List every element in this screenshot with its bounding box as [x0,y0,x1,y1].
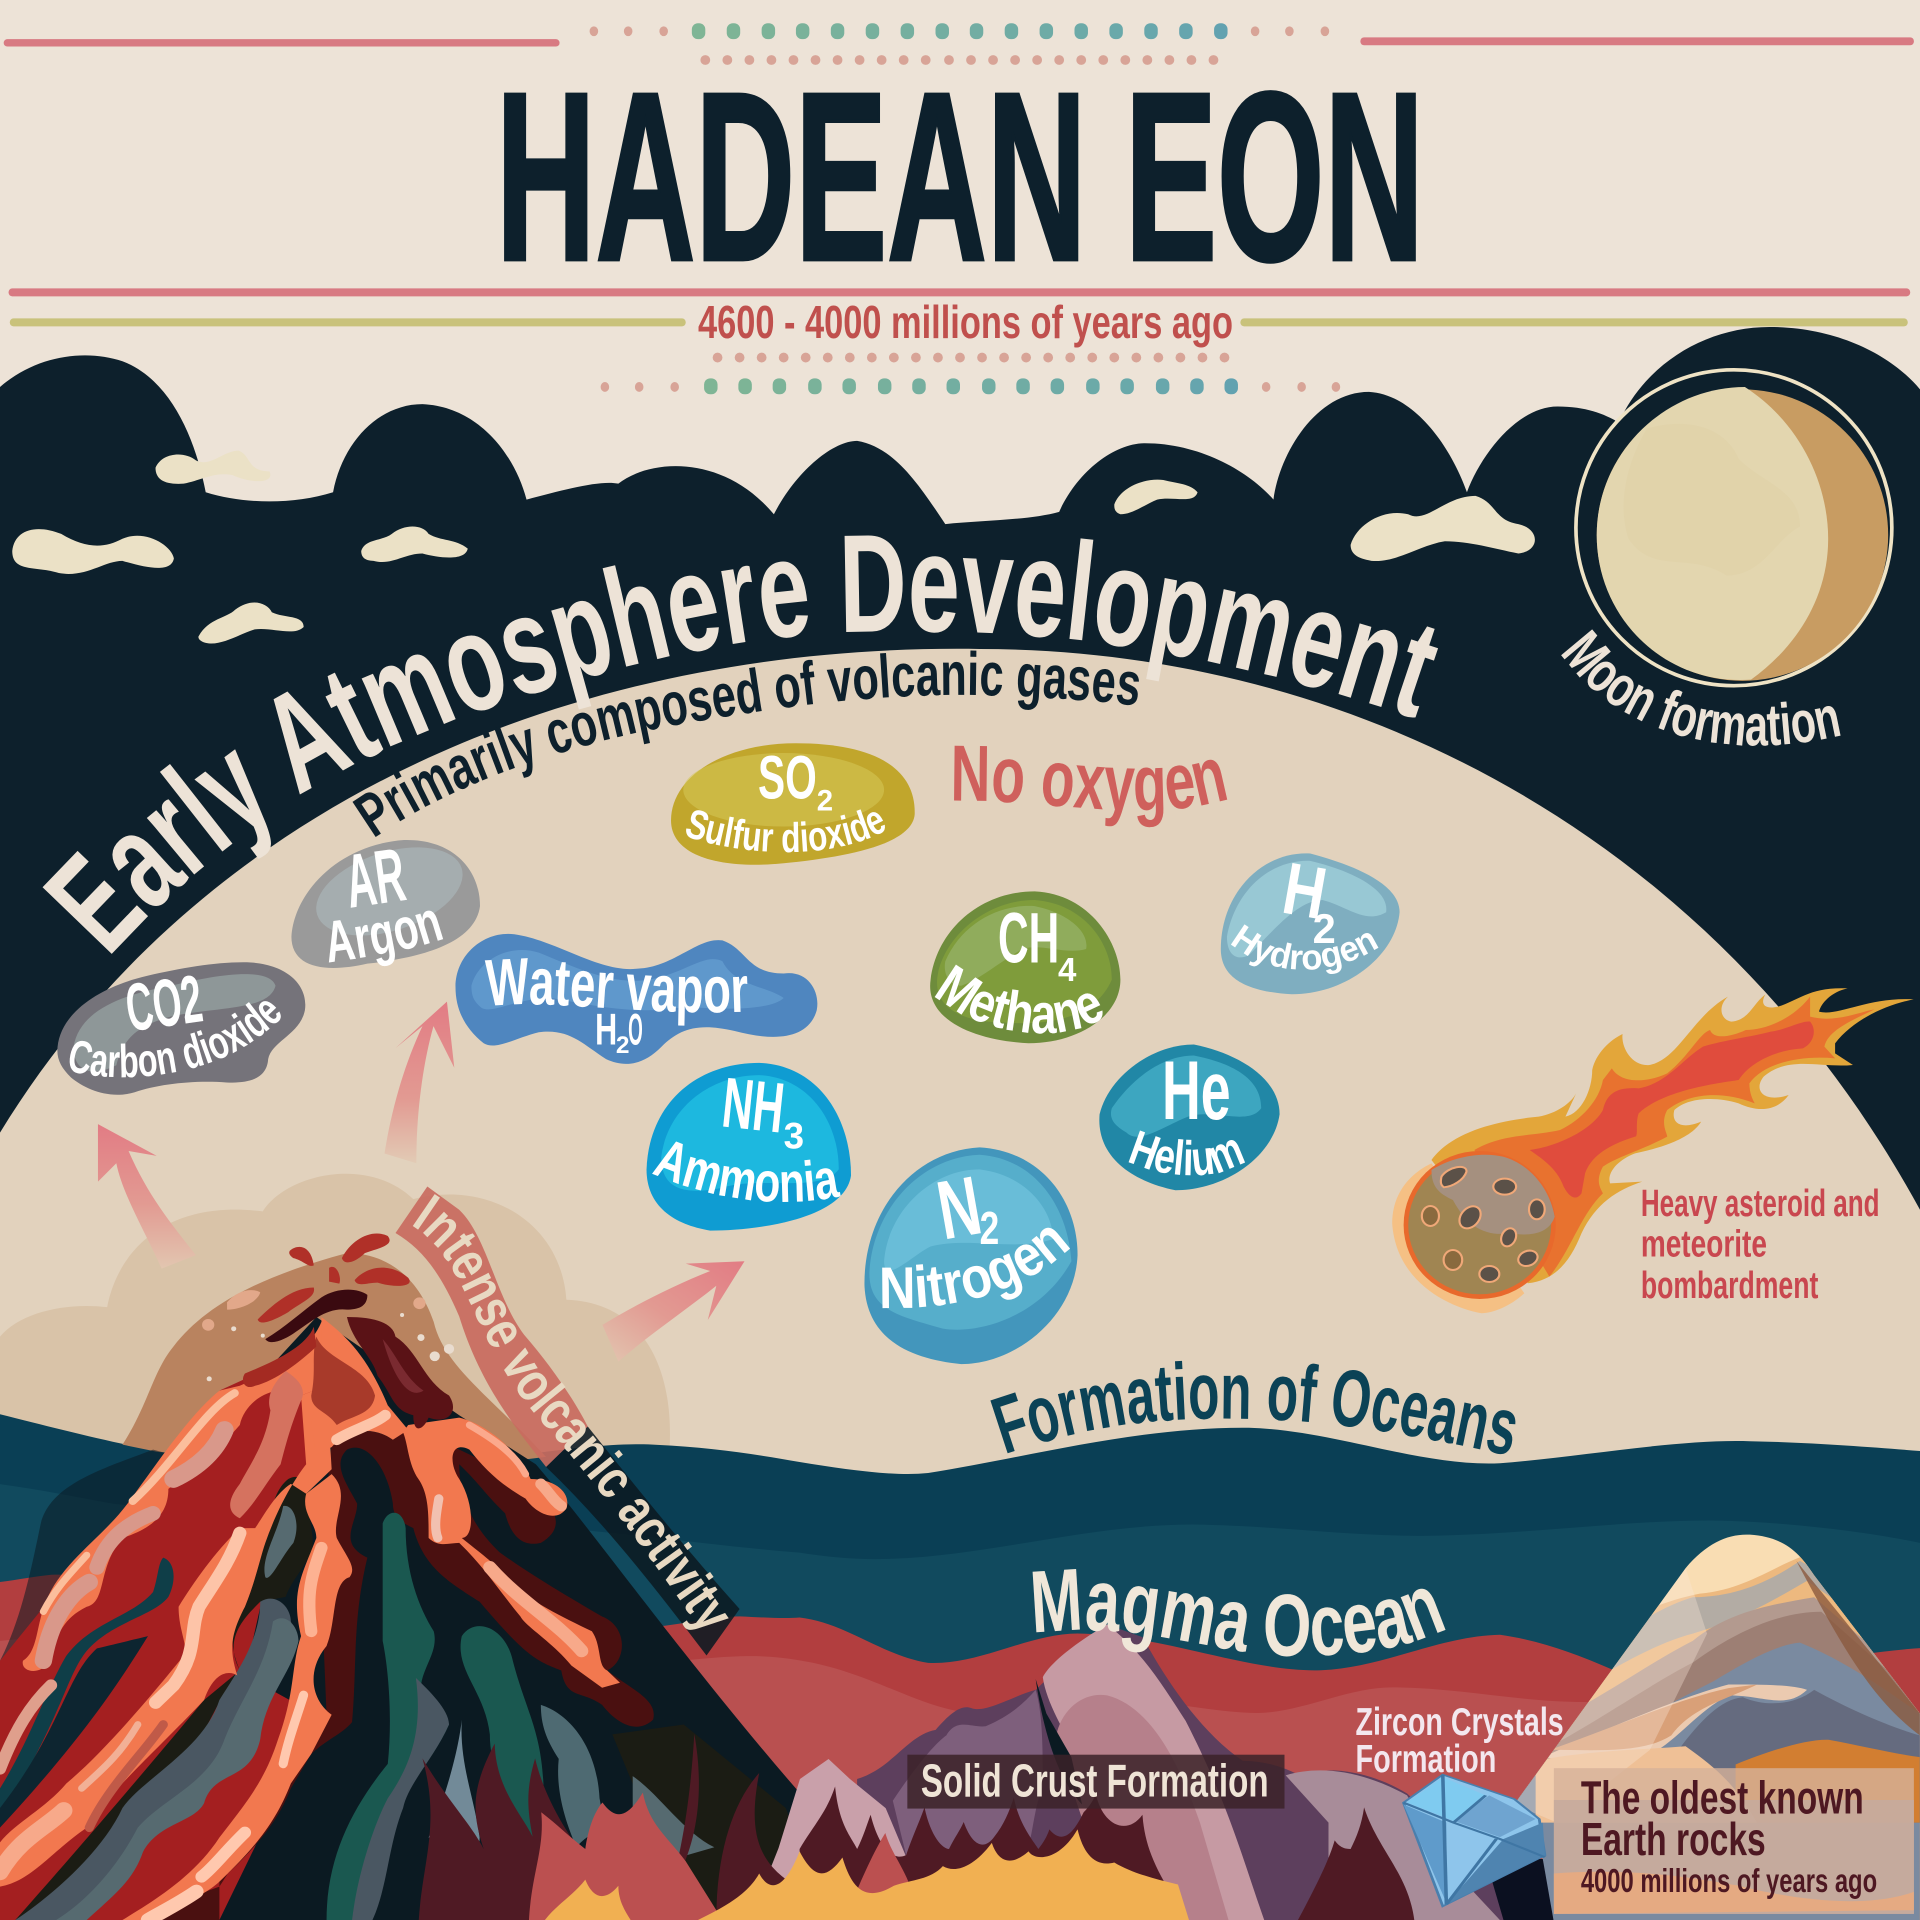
gas bubble: helium: Helium [1128,1130,1245,1176]
volcano [0,1234,800,1920]
gas bubble: nitrogen: 2 [980,1202,999,1254]
shadow gap beside the rock [1486,1859,1553,1920]
icon: meteor flame trail [1431,988,1914,1283]
banner: intense volcanic activity: Intense volcanic activity [412,1194,729,1630]
right foothill [1286,1770,1500,1920]
subtitle: time range: 4600 - 4000 millions of years ago [698,296,1233,348]
label: asteroid bombardment [1641,1183,1880,1307]
heading: early atmosphere development: Early Atmosphere Development [42,536,1438,954]
icon: moon [1576,370,1892,686]
gas bubble: hydrogen: 2 [1313,905,1336,952]
bottom flames [419,1734,1414,1920]
gas bubble: nitrogen [864,1147,1078,1364]
atmosphere dome [0,649,1920,1920]
mountains: solid crust [750,1624,1543,1920]
header decoration: rules and dots [4,23,1914,394]
gas bubble: water vapor [455,934,818,1064]
gas bubble: carbon dioxide: Carbon dioxide [70,1001,281,1078]
crater flows [243,1290,453,1428]
salmon slope [230,1371,303,1518]
gas bubble: sulfur dioxide: SO [758,743,817,811]
peak crack [1036,1679,1082,1804]
gas bubble: ammonia: 3 [784,1116,804,1157]
callout: no oxygen: No oxygen [954,746,1228,828]
label: magma ocean: Magma Ocean [1032,1569,1446,1656]
gas bubble: helium: He [1162,1044,1231,1137]
icon: zircon crystal [1403,1775,1545,1906]
gas bubble: methane: 4 [1058,952,1077,989]
label: formation of oceans: Formation of Oceans [990,1360,1516,1454]
gas bubble: hydrogen: Hydrogen [1231,924,1378,974]
icon: clouds [12,451,1535,644]
gas bubble: argon [291,832,480,968]
lava bombs and ash specks [202,1234,454,1381]
gas bubble: ammonia: Ammonia [652,1142,841,1202]
arrow: up to water vapor [384,1002,454,1163]
gas bubble: sulfur dioxide: 2 [817,785,833,818]
panel: oldest known Earth rocks [1554,1768,1914,1914]
left foothill [750,1759,929,1920]
gas bubble: water vapor: H [595,1005,617,1054]
gas bubble: argon: AR [340,832,410,925]
gas bubble: argon: Argon [328,910,444,966]
icon: meteor rock [1392,1151,1556,1313]
red lava field [0,1346,327,1920]
gas bubble: water vapor: Water vapor [484,958,748,1026]
gas bubble: carbon dioxide: CO2 [121,961,207,1046]
dark streams on the flanks [0,1477,313,1920]
label: solid crust formation: Solid Crust Formation [921,1754,1269,1806]
gas bubble: sulfur dioxide [671,743,915,865]
label: zircon crystals: Formation [1356,1738,1496,1781]
subheading: volcanic gases: Primarily composed of volcanic gases [352,650,1139,837]
dark sky with scalloped clouds [0,327,1920,1249]
gas bubble: water vapor: O [628,1005,643,1054]
ash cone [122,1253,546,1464]
lava highlights [0,1393,582,1920]
purple mountain range [857,1624,1543,1920]
teal and grey streams [327,1513,714,1920]
gas bubble: nitrogen: Nitrogen [882,1228,1070,1308]
orange lava flows [0,1317,620,1920]
gas bubble: hydrogen: H [1277,846,1333,935]
gas bubble: hydrogen [1220,846,1400,994]
layered rock mountain [1486,1532,1920,1920]
label: zircon crystals [1356,1701,1564,1781]
main peak [1043,1624,1264,1920]
meteor [1392,988,1914,1313]
dark maroon flows [128,1425,654,1920]
label: moon formation: Moon formation [1561,629,1840,746]
gas bubble: water vapor: 2 [616,1032,630,1059]
gas bubble: methane: CH [998,899,1059,978]
gas bubble: helium [1099,1044,1280,1190]
gas bubble: nitrogen: N [931,1159,988,1257]
label: zircon crystals: Zircon Crystals [1356,1701,1564,1744]
muted mauve slope [893,1690,1043,1881]
label: asteroid bombardment: bombardment [1641,1265,1819,1307]
arrow: right to ammonia [602,1261,744,1362]
magma layers [0,1575,1920,1920]
volcano shadow and body [0,1317,800,1920]
label: asteroid bombardment: meteorite [1641,1223,1767,1265]
gas bubble: ammonia [646,1062,851,1231]
volcanic smoke cloud [0,1174,670,1474]
gas bubble: methane [930,891,1120,1044]
gas bubble: methane: Methane [934,964,1103,1034]
panel: oldest known Earth rocks: Earth rocks [1581,1813,1766,1865]
gas bubble: ammonia: NH [719,1064,788,1149]
ocean layers [0,1414,1920,1920]
arrow: up to carbon dioxide [98,1124,196,1269]
gas bubble: sulfur dioxide: Sulfur dioxide [686,809,885,852]
